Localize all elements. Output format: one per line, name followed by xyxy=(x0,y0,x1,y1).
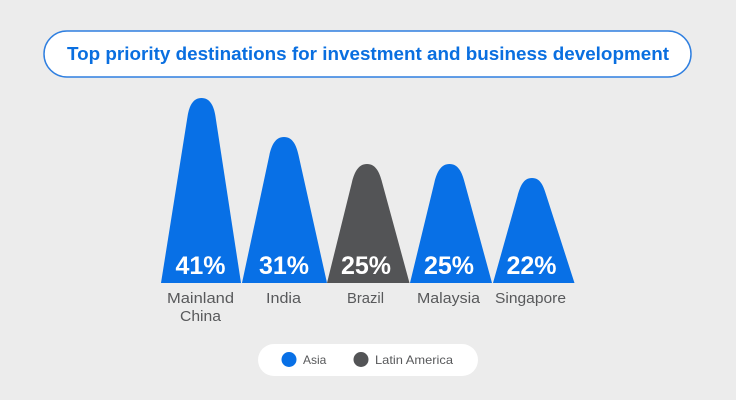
title xyxy=(44,31,691,77)
bar: India 31%: India xyxy=(266,290,302,307)
legend item: Latin America: Latin America xyxy=(375,353,453,367)
bar: Singapore 22% xyxy=(493,178,574,307)
bar: Malaysia 25%: 25% xyxy=(424,252,474,280)
bar: Mainland China 41%: Mainland xyxy=(167,290,234,307)
bar: Mainland China 41%: 41% xyxy=(175,252,226,280)
legend item: Asia: Asia xyxy=(303,353,327,367)
legend item: Latin America xyxy=(354,352,453,367)
title: Top priority destinations for investment and business development xyxy=(67,43,669,64)
bar: Mainland China 41% xyxy=(161,98,241,325)
bar: Mainland China 41%: China xyxy=(180,308,222,325)
legend item: Asia xyxy=(282,352,327,367)
bar: Singapore 22%: Singapore xyxy=(495,290,566,307)
bar: Brazil 25% xyxy=(327,164,410,307)
bar: India 31%: 31% xyxy=(259,252,309,280)
bar chart xyxy=(161,98,574,325)
legend xyxy=(258,344,478,376)
bar: India 31% xyxy=(242,137,327,307)
bar: Brazil 25%: Brazil xyxy=(347,290,384,307)
bar: Malaysia 25% xyxy=(410,164,492,307)
bar: Malaysia 25%: Malaysia xyxy=(417,290,481,307)
bar: Singapore 22%: 22% xyxy=(506,252,557,280)
bar: Brazil 25%: 25% xyxy=(341,252,391,280)
